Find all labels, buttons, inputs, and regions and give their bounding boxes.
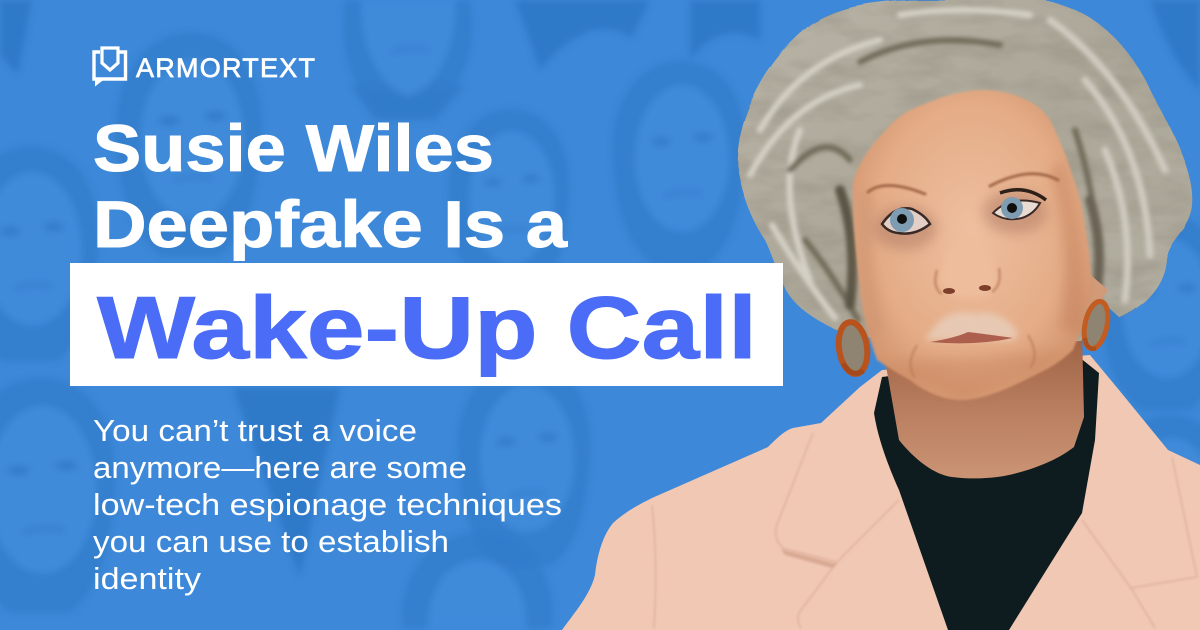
subtitle: anymore—here are some — [93, 450, 467, 485]
logo — [94, 48, 315, 84]
eye sockets — [873, 206, 937, 250]
left earring — [836, 320, 870, 376]
right eye — [993, 190, 1046, 219]
right ear — [1082, 270, 1108, 310]
collar and lapels — [652, 433, 1197, 628]
face — [853, 90, 1091, 400]
left eye — [882, 208, 930, 234]
title line 1: Susie Wiles — [93, 111, 494, 185]
logo icon: shield in speech bubble — [94, 48, 126, 84]
subtitle — [93, 413, 562, 596]
highlighted title: Wake-Up Call — [97, 278, 757, 377]
hair highlights — [750, 10, 1165, 320]
nose — [935, 235, 1000, 298]
hair shading — [730, 0, 1200, 345]
portrait: woman with grey hair and peach coat — [562, 0, 1200, 630]
logo wordmark: ARMORTEXT — [136, 53, 315, 83]
shading: jaw and temples — [880, 350, 1070, 400]
neck — [885, 330, 1084, 478]
highlight box — [70, 263, 783, 386]
subtitle: low-tech espionage techniques — [93, 487, 562, 522]
subtitle: You can’t trust a voice — [93, 413, 417, 448]
right earring — [1080, 299, 1112, 351]
hair — [737, 0, 1192, 340]
collar shadow — [781, 549, 837, 568]
smile lines — [910, 335, 1035, 378]
mouth — [925, 312, 1018, 343]
title line 2: Deepfake Is a — [93, 187, 568, 261]
coat — [562, 355, 1200, 630]
eyebrows — [868, 174, 1058, 194]
turtleneck — [874, 353, 1099, 630]
subtitle: identity — [93, 561, 202, 596]
subtitle: you can use to establish — [93, 524, 449, 559]
